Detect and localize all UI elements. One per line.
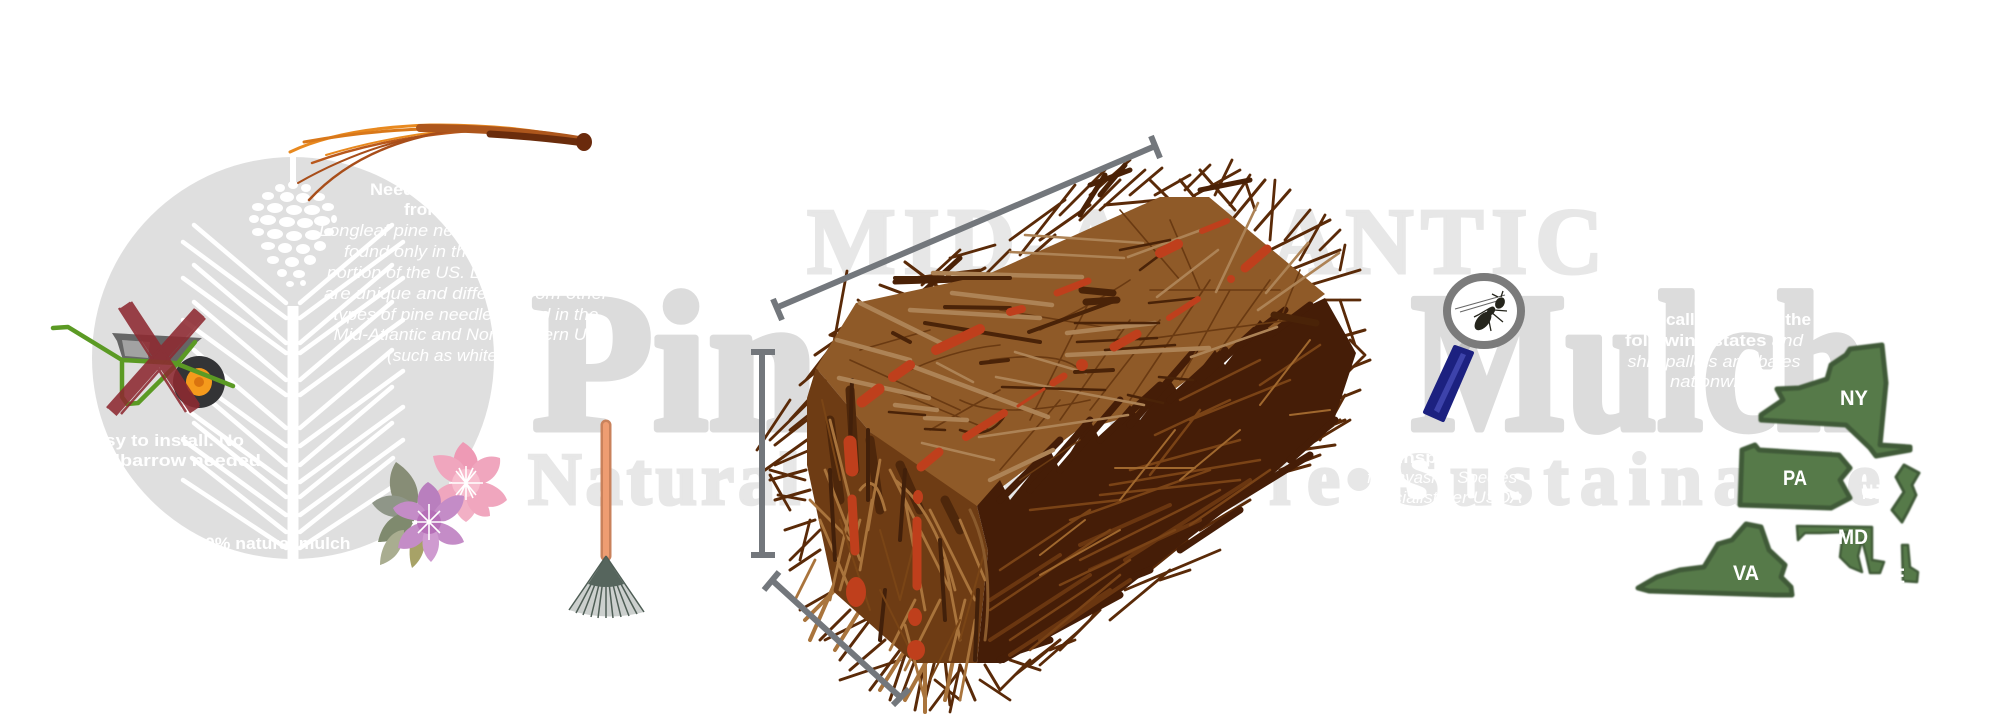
icon: flowers [372,442,507,568]
state labels: MD [1838,526,1868,549]
state: New Jersey [1892,465,1919,522]
text block: inspected: Specialist per USDA [1362,488,1522,507]
text block: locally sourced: following states and [1625,331,1804,350]
bale right side strokes [1000,305,1335,660]
text block: inspected: for Invasive Species [1367,468,1517,487]
watermark heading: Mid-Atlantic: MID-ATLANTIC [807,190,1603,294]
text block: needles from the South: Mid-Atlantic and Northeastern US [334,325,599,344]
text block: needles from the South: found only in the Southeastern [344,242,588,261]
bale front face strokes [830,390,960,530]
bale top face needles [850,210,1300,480]
state: Virginia [1638,524,1792,595]
text block: locally sourced: nationwide [1670,372,1758,391]
pine cone emblem [249,181,337,287]
text block: needles from the South: Longleaf pine needles are harvested [319,221,614,240]
dimension bracket: width [764,572,909,705]
bale red twine [850,221,1267,586]
text block: easy to install: Easy to install. No [82,431,244,450]
icon: rake [569,425,644,618]
text block: easy to install [64,431,261,470]
watermark tagline: Natural [528,439,800,521]
icon: wheelbarrow crossed out [53,302,233,414]
state: Delaware [1902,545,1918,582]
watermark tagline: • [826,439,852,521]
icon: magnifying glass with ant [1425,277,1521,420]
text block: inspected [1362,448,1522,507]
text block: locally sourced: Locally grown in the [1645,310,1811,329]
text block: needles from the South: (such as white pine). [387,346,545,365]
text block: needles from the South: are unique and different from other [324,284,609,303]
background circle [92,157,494,559]
text block: locally sourced [1625,310,1811,391]
text block: natural mulch: 100% natural mulch [186,534,350,553]
state labels: NY [1840,387,1868,410]
text block: needles from the South: portion of the US. Longleaf needles [326,263,606,282]
watermark heading: Pine Straw Mulch [532,253,1867,472]
state: Pennsylvania [1740,445,1850,508]
state labels: DE [1883,565,1905,588]
pine branch emblem [183,157,403,560]
watermark heading: Pine Straw Mulch: Mulch [1411,253,1867,472]
watermark tagline: • [1346,439,1372,521]
text block: needles from the South: types of pine needles found in the [334,305,598,324]
text block: needles from the South: from the South [404,200,528,219]
bale faces [816,197,1325,506]
watermark heading: Pine Straw Mulch: Straw [900,253,1290,472]
watermark tagline [528,439,1880,521]
dimension bracket: height [751,352,775,555]
state: Maryland [1797,526,1884,573]
dimension bracket: length [773,136,1160,320]
bale outer fringe [757,160,1365,712]
text block: inspected: Inspected [1398,448,1486,467]
map: mid-atlantic states [1638,345,1919,595]
text block: needles from the South: Needles are harvested [370,180,562,199]
watermark tagline: Renewable [860,439,1340,521]
state labels: VA [1733,562,1759,585]
state: New York [1761,345,1910,456]
text block: needles from the South [319,180,614,365]
icon: pine needle [290,125,592,200]
icon: pine straw bale [757,160,1370,712]
text block: easy to install: wheelbarrow needed [64,451,261,470]
text block: locally sourced: ship pallets and bales [1628,352,1801,371]
watermark heading: Pine Straw Mulch: Pine [532,253,906,472]
watermark tagline: Sustainable [1398,439,1880,521]
state labels [1733,387,1905,588]
state labels: NJ [1862,481,1882,504]
state labels: PA [1783,467,1807,490]
